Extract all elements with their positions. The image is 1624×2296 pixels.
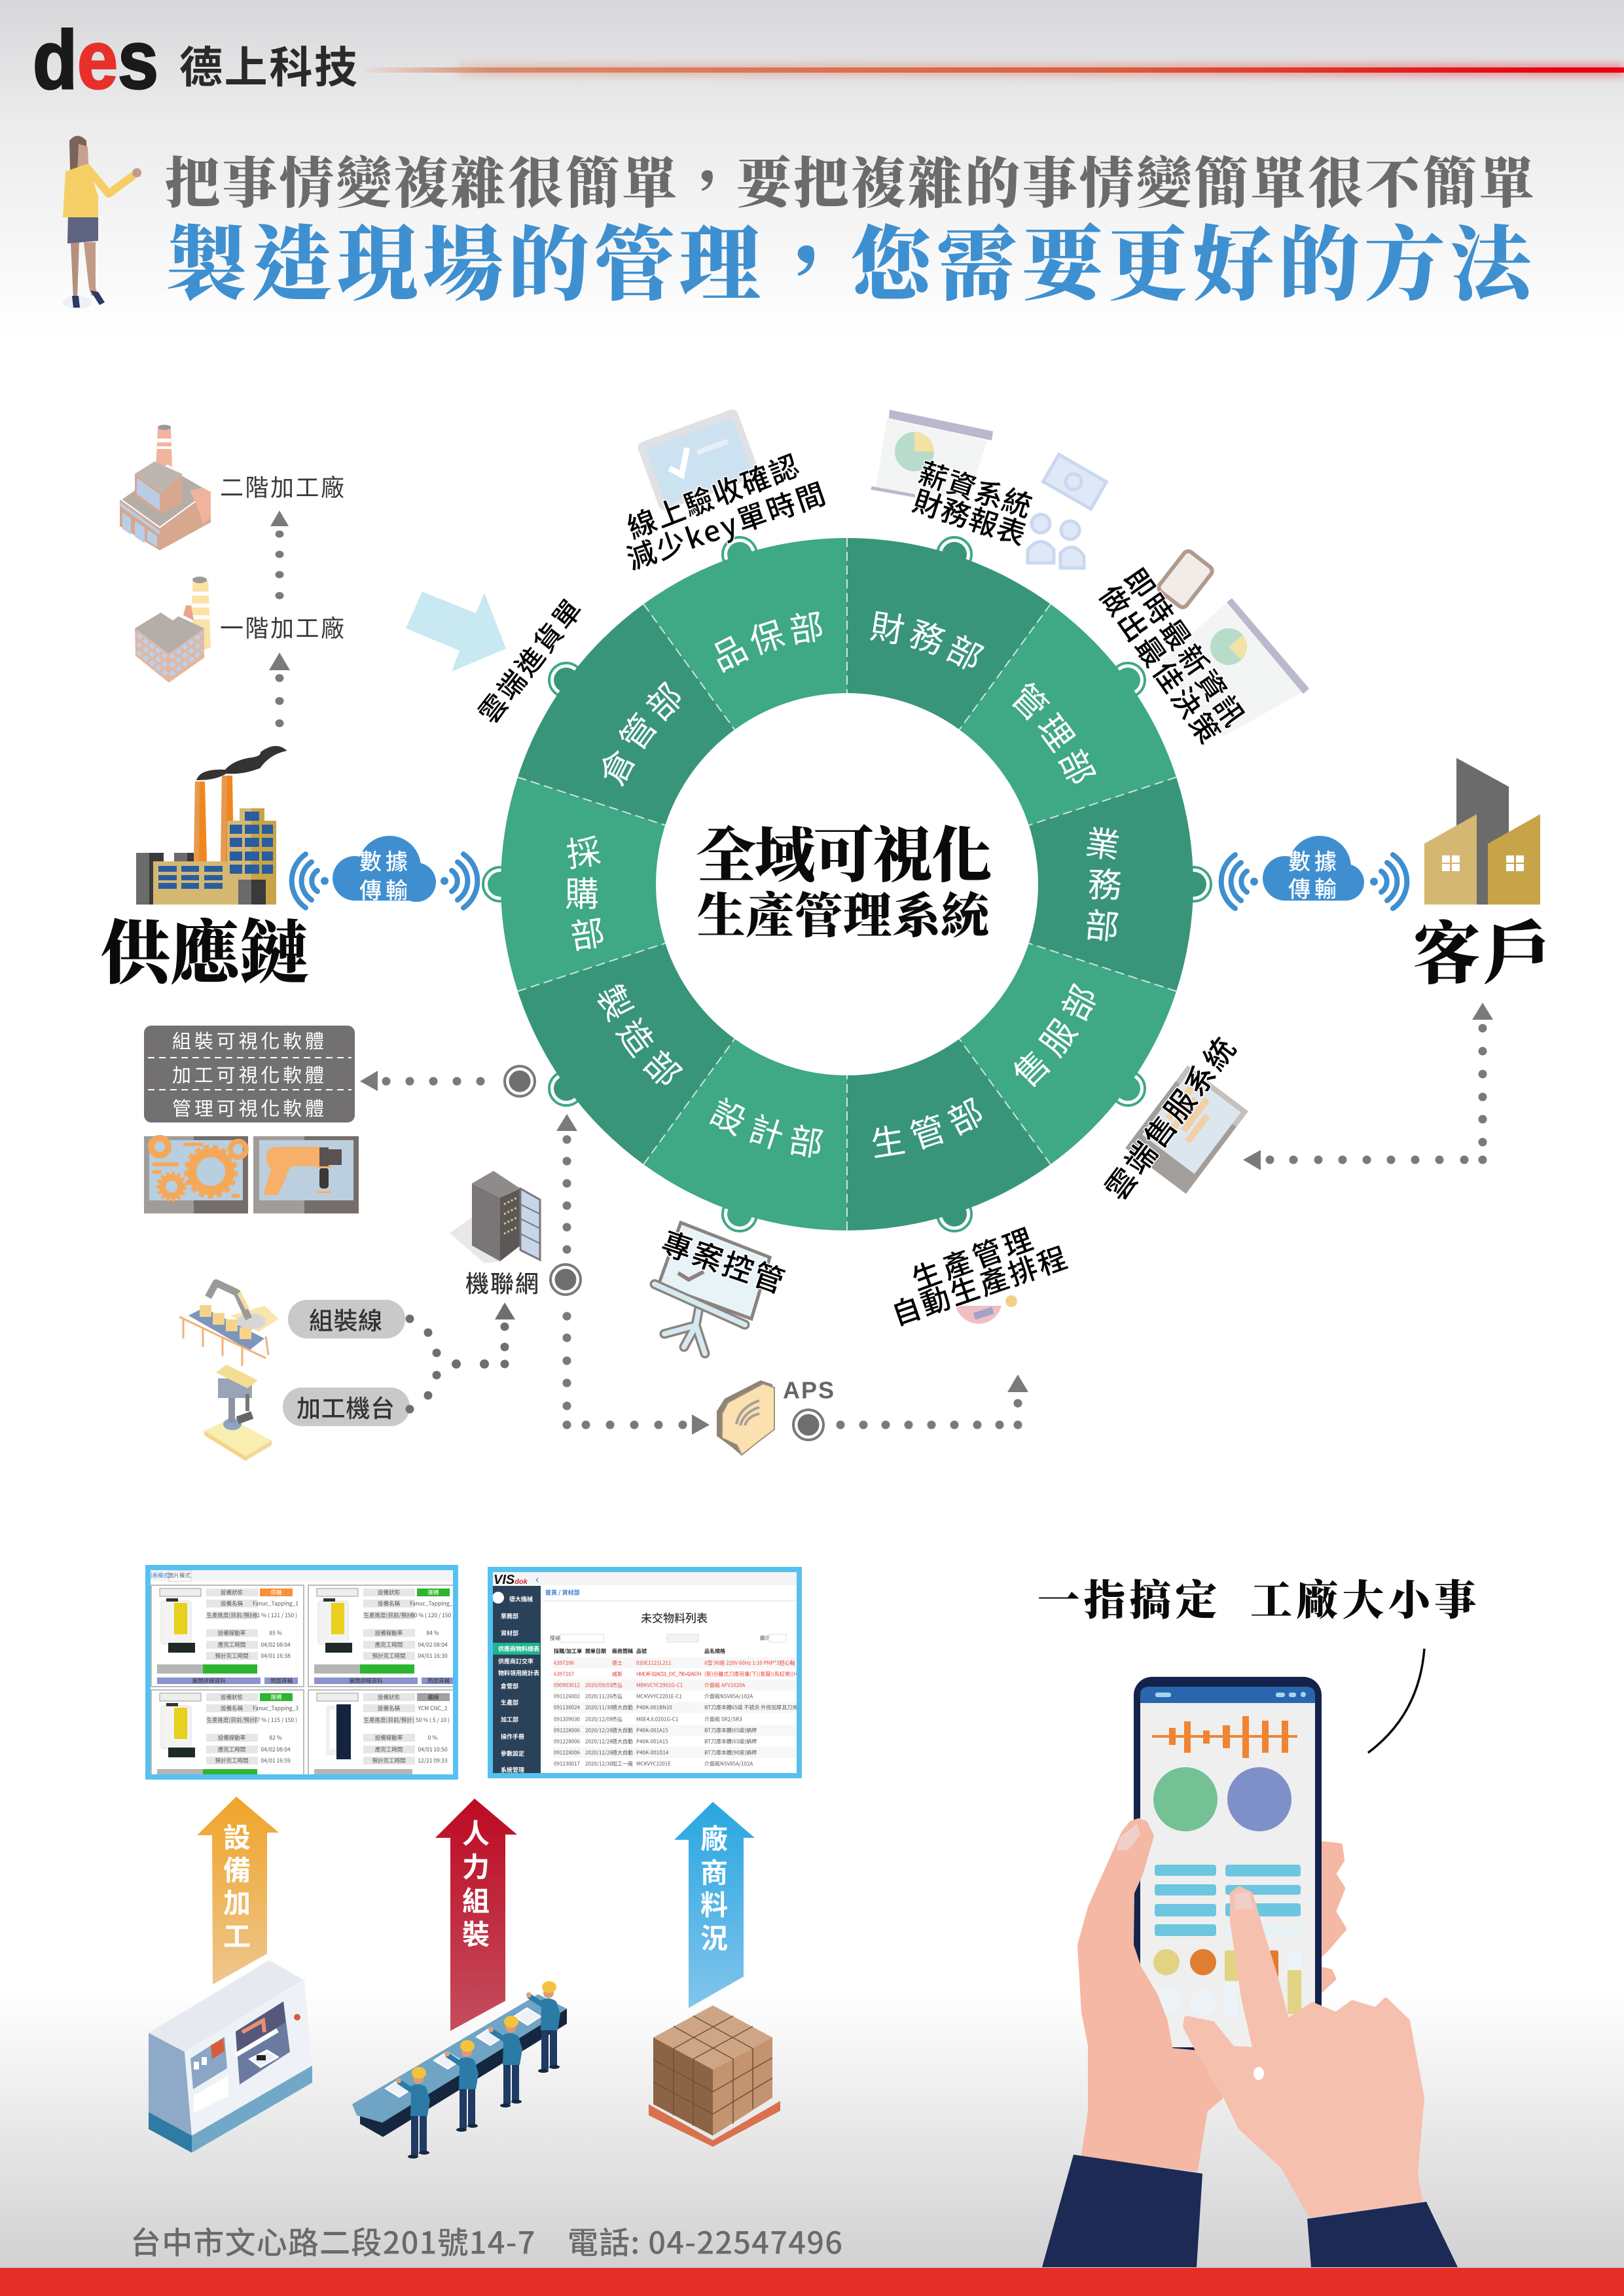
machine panel 2: 04/01 16:30 [418, 1652, 448, 1660]
panel: material list screenshot: 倉管部 [501, 1682, 518, 1690]
panel: material list screenshot: 德大機械 [509, 1594, 533, 1604]
panel: material list screenshot: 2020/12/30 [585, 1761, 613, 1767]
machine panel 1: 81 % ( 121 / 150 ) [254, 1611, 297, 1619]
machine panel 3: 82 % [269, 1734, 282, 1742]
panel: visualization software list [144, 1026, 355, 1122]
label: manufacturing: 部 [635, 1037, 694, 1096]
icon: CNC machine [149, 1960, 312, 2153]
icon: production scheduling [956, 1295, 1017, 1324]
panel: material list screenshot: 採購/加工單 [554, 1648, 582, 1655]
machine panel 3: 04/01 16:59 [261, 1757, 291, 1765]
label: warehouse [585, 671, 692, 793]
machine panel 2: 04/02 08:04 [418, 1641, 448, 1649]
label: design: 計 [744, 1102, 791, 1158]
panel: material list screenshot: VISdok [494, 1573, 528, 1587]
panel: material list screenshot: 品名規格 [704, 1648, 725, 1655]
callout: payroll and finance [908, 450, 1038, 554]
label: management: 管 [1002, 671, 1060, 729]
panel: material list screenshot: 091228006 [554, 1738, 581, 1745]
arrow: manpower assembly: 裝 [462, 1919, 490, 1950]
label: sales: 部 [1083, 897, 1121, 950]
icon: online acceptance check [636, 408, 761, 512]
node: software connector [505, 1066, 535, 1096]
panel: material list screenshot: 杰弘 [612, 1716, 623, 1723]
label: after-sales: 部 [1048, 975, 1107, 1028]
machine panel 4: 04/01 10:50 [418, 1746, 448, 1753]
label: first tier factory: 一階加工廠 [220, 615, 344, 641]
panel: material list screenshot: 供應商訂交率 [498, 1657, 533, 1665]
icon: left data transfer cloud: 傳輸 [359, 873, 408, 905]
panel: material list screenshot: P40K-001D14 [636, 1749, 669, 1757]
center title: 全域可視化 [696, 823, 992, 889]
icon: server rack [450, 1171, 540, 1263]
panel: material list screenshot: 091209030 [554, 1716, 581, 1723]
icon: drill monitor [253, 1136, 359, 1213]
arrow: manpower assembly: 組 [462, 1886, 490, 1916]
callout: production management: 自動生產排程 [886, 1234, 1072, 1334]
machine panel 4: 0 % [428, 1734, 437, 1742]
arrow: service to customer dots [1243, 1003, 1493, 1170]
label: after-sales: 售 [1000, 1037, 1059, 1096]
panel: equipment monitoring screenshot: 列表模式 [147, 1571, 169, 1579]
icon: left data transfer cloud: 數據 [359, 844, 408, 876]
panel: material list screenshot: 6397206 [554, 1660, 575, 1666]
panel: material list screenshot: 2020/12/28 [585, 1727, 613, 1734]
panel: material list screenshot: 德士 [612, 1660, 623, 1666]
panel: material list screenshot: 德大自動 [612, 1749, 633, 1757]
label: management [1002, 671, 1109, 793]
panel: material list screenshot: 搜尋: [550, 1635, 562, 1641]
phone audio bars [1152, 1716, 1297, 1758]
footer red bar [0, 2268, 1624, 2296]
panel: visualization software list: 管理可視化軟體 [172, 1094, 324, 1121]
panel: material list screenshot: MBKVCYC2901G-C1 [636, 1682, 683, 1689]
machine panel 3 [151, 1689, 304, 1774]
panel: material list screenshot: 2020/12/09 [585, 1716, 613, 1723]
callout: real-time information: 即時最新資訊 [1116, 558, 1256, 734]
panel: material list screenshot: 杰弘 [612, 1693, 623, 1700]
panel: material list screenshot: 廠商簡稱 [612, 1648, 633, 1655]
callout: project control: 專案控管 [657, 1219, 790, 1302]
panel: material list screenshot: 2020/12/28 [585, 1738, 613, 1745]
label: assembly line pill [288, 1300, 405, 1338]
arrow: vendor materials: 商 [700, 1857, 728, 1889]
label: purchasing: 部 [566, 905, 608, 959]
center title: 生產管理系統 [697, 889, 994, 944]
label: after-sales [1000, 975, 1107, 1096]
panel: material list screenshot: 品號 [636, 1648, 647, 1655]
panel: material list screenshot: (新)分離式刀庫荷重(下)(氣壓)(有紅燈)(H=250) [704, 1670, 811, 1678]
icon: cloud service monitor [1125, 1066, 1248, 1194]
footer address: 台中市文心路二段201號14-7 電話: 04-22547496 [130, 2217, 842, 2263]
label: sales [1083, 815, 1123, 950]
callout: payroll and finance: 財務報表 [908, 478, 1032, 554]
label: manufacturing [587, 975, 694, 1096]
panel: material list screenshot: 介面板NSV85A/102A [704, 1761, 753, 1767]
icon: project presentation board [655, 1223, 770, 1354]
arrow: APS to production dots [837, 1374, 1028, 1429]
label: design [703, 1085, 827, 1166]
icon: main supply-chain factory [136, 747, 284, 905]
machine panel 4: 離線 [427, 1693, 439, 1701]
callout: real-time information: 做出最佳決策 [1091, 575, 1231, 751]
arrow: cloud purchase order [406, 592, 506, 672]
machine panel 1: 停機 [270, 1588, 282, 1596]
panel: material list screenshot: ‹ [535, 1574, 539, 1585]
panel: material list screenshot: 杰弘 [612, 1682, 623, 1689]
panel: material list screenshot: 供應商物料總表 [498, 1644, 539, 1653]
title line 1: 把事情變複雜很簡單，要把複雜的事情變簡單很不簡單 [165, 154, 1534, 215]
icon: gears monitor [144, 1136, 248, 1213]
panel: material list screenshot: 091228006 [554, 1727, 581, 1734]
panel: material list screenshot: 顯示 [760, 1635, 770, 1641]
arrow: machines to network dots [406, 1302, 515, 1414]
label: quality: 部 [785, 599, 827, 653]
machine panel 3: 運轉 [270, 1693, 282, 1701]
label: machine pill: 加工機台 [297, 1389, 395, 1424]
icon: APS wifi bubble [717, 1380, 774, 1455]
machine panel 2 [308, 1585, 461, 1687]
panel: equipment monitoring screenshot [145, 1565, 461, 1791]
label: management: 部 [1049, 740, 1109, 793]
arrow: manufacturing to software dots [360, 1071, 484, 1091]
panel: material list screenshot: 德大自動 [612, 1738, 633, 1745]
panel: material list screenshot: P40K-001A15 [636, 1727, 668, 1734]
label: manufacturing: 製 [587, 975, 646, 1028]
panel: material list screenshot: BT刀庫本體65座 不銹杀 外徑加厚且刀夾加長25mm [704, 1704, 823, 1711]
panel: material list screenshot: 開單日期 [585, 1648, 606, 1655]
panel: equipment monitoring screenshot: 圖片模式 [168, 1571, 190, 1579]
panel: material list screenshot: P40K-001BN10 [636, 1704, 672, 1711]
panel: material list screenshot: 2020/12/28 [585, 1749, 613, 1757]
panel: material list screenshot: 020E1121L211 [636, 1660, 671, 1666]
callout: payroll and finance: 薪資系統 [914, 450, 1038, 526]
label: quality: 保 [742, 607, 790, 664]
icon: right data transfer cloud: 數據 [1288, 844, 1337, 876]
icon: left data transfer cloud [292, 836, 477, 908]
panel: material list screenshot: BT刀庫本體(90度)蝸桿 [704, 1749, 757, 1757]
panel: material list screenshot: 業務部 [501, 1611, 518, 1621]
panel: material list screenshot: 資材部 [501, 1628, 518, 1638]
panel: material list screenshot: 091130024 [554, 1704, 581, 1711]
label: finance: 部 [939, 621, 992, 681]
icon: first tier factory [135, 577, 211, 683]
machine panel 3: 04/02 08:04 [261, 1746, 291, 1753]
panel: material list screenshot: 德大自動 [612, 1704, 633, 1711]
callout: cloud purchase: 雲端進貨單 [468, 590, 590, 730]
icon: second tier factory [120, 425, 211, 550]
machine panel 4: YCM CNC_1 [417, 1704, 448, 1712]
panel: material list screenshot: BT刀庫本體(65座)蝸桿 [704, 1738, 757, 1745]
arrow: equipment machining: 加 [223, 1888, 251, 1919]
label: warehouse: 倉 [585, 740, 645, 793]
panel: material list screenshot: 系統管理 [501, 1766, 524, 1774]
icon: real-time dashboards [1157, 549, 1309, 736]
icon: customer buildings [1424, 758, 1540, 905]
callout: production management: 生產管理 [905, 1216, 1038, 1299]
label: second tier factory: 二階加工廠 [220, 474, 344, 501]
arrow: equipment machining [197, 1797, 279, 1984]
panel: material list screenshot: 未交物料列表 [641, 1609, 708, 1626]
label: design: 設 [703, 1085, 756, 1144]
icon: pallet of boxes [649, 2005, 780, 2147]
panel: material list screenshot: BT刀庫本體(65座)蝸桿 [704, 1727, 757, 1734]
panel: material list screenshot: 6397207 [554, 1670, 575, 1678]
logo: des 德上科技: 德上科技 [179, 43, 357, 92]
machine panel 2: 84 % [426, 1629, 439, 1637]
arrow: equipment machining: 備 [223, 1855, 251, 1886]
panel: material list screenshot: MCKVYC2201E [636, 1761, 671, 1767]
arrow: manpower assembly: 人 [462, 1818, 490, 1850]
arrow: vendor materials [674, 1802, 755, 2008]
logo: des 德上科技: des [33, 14, 158, 106]
label: APS: APS [783, 1377, 834, 1403]
label: manufacturing: 造 [608, 1008, 668, 1064]
icon: right data transfer cloud: 傳輸 [1288, 872, 1337, 903]
label: assembly line pill: 組裝線 [309, 1301, 382, 1336]
panel: material list screenshot: 091126002 [554, 1693, 581, 1700]
panel: visualization software list: 加工可視化軟體 [172, 1060, 324, 1088]
panel: material list screenshot: 介面板NSV85A/102A [704, 1693, 753, 1700]
left sleeve [1042, 2155, 1202, 2267]
panel: material list screenshot: MCKVVYC2201E-C1 [636, 1693, 682, 1700]
icon: assembly line workers [352, 1981, 567, 2159]
panel: material list screenshot: 2020/09/03 [585, 1682, 613, 1689]
panel: material list screenshot: 介面板 AFV1020A [704, 1682, 745, 1689]
machine panel 4: 50 % ( 5 / 10 ) [416, 1716, 450, 1724]
panel: material list screenshot: II型 90度 220V 60Hz 1:10 PNP*3迴心軸 [704, 1660, 795, 1666]
node: machine network connector [550, 1265, 581, 1295]
panel: material list screenshot: 參數設定 [501, 1749, 524, 1758]
panel: material list screenshot: 生產部 [501, 1698, 518, 1707]
arrow: manpower assembly [435, 1799, 517, 2031]
panel: material list screenshot: 091230017 [554, 1761, 581, 1767]
panel: department wheel [483, 537, 1211, 1231]
panel: material list screenshot: HMC4F-02AC01_1YC_790-42A67H [636, 1670, 702, 1678]
label: management: 理 [1028, 703, 1088, 759]
label: production control: 生 [867, 1113, 908, 1166]
label: production control [867, 1085, 991, 1166]
machine panel 2: 運轉 [427, 1588, 439, 1596]
left hand [1079, 1820, 1221, 2170]
machine panel 1 [151, 1585, 304, 1687]
callout: online acceptance: 線上驗收確認 [621, 443, 804, 547]
right sleeve [1307, 2202, 1458, 2267]
arrow: second tier dots [270, 511, 289, 600]
machine panel 1: 04/01 16:38 [261, 1652, 291, 1660]
panel: material list screenshot: 操作手冊 [501, 1732, 524, 1741]
label: design: 部 [786, 1113, 827, 1166]
label: purchasing [564, 824, 608, 959]
wheel sectors [501, 538, 1193, 1230]
right hand [1185, 1889, 1422, 2215]
panel: material list screenshot [488, 1567, 823, 1778]
label: quality [702, 599, 827, 681]
red header line [363, 63, 1624, 77]
icon: phone held in hands [1042, 1677, 1458, 2267]
machine panel 1: 04/02 08:04 [261, 1641, 291, 1649]
label: after-sales: 服 [1026, 1008, 1086, 1064]
label: finance: 財 [867, 599, 909, 653]
label: finance: 務 [904, 607, 952, 664]
label: machine network: 機聯網 [465, 1265, 539, 1299]
panel: material list screenshot: 威斯 [612, 1670, 623, 1678]
icon: drill press [204, 1365, 272, 1461]
left hand fingers behind phone [1321, 1844, 1344, 1990]
panel: material list screenshot: M0E4JL0201G-C1 [636, 1716, 678, 1723]
icon: right data transfer cloud [1221, 836, 1407, 908]
label: warehouse: 管 [606, 703, 666, 759]
machine panel 4: 12/21 09:33 [418, 1757, 448, 1765]
label: purchasing: 購 [565, 867, 599, 916]
panel: material list screenshot: 2020/11/30 [585, 1704, 613, 1711]
panel: visualization software list: 組裝可視化軟體 [172, 1026, 324, 1054]
icon: presenter woman [63, 136, 141, 309]
machine panel 3: Fanuc_Tapping_3 [253, 1704, 298, 1712]
machine panel 2: 80 % ( 120 / 150 ) [411, 1611, 454, 1619]
label: quality: 品 [702, 621, 755, 681]
heading: supply chain: 供應鏈 [101, 916, 309, 992]
label: sales: 務 [1087, 857, 1123, 907]
label: production control: 部 [938, 1085, 991, 1144]
panel: material list screenshot: 加工部 [501, 1715, 518, 1724]
phone body [1134, 1677, 1322, 2054]
heading: one finger: 一指搞定 工廠大小事 [1038, 1577, 1476, 1624]
label: production control: 管 [903, 1102, 950, 1158]
arrow: manpower assembly: 力 [462, 1852, 490, 1882]
arrow: vendor materials: 廠 [700, 1823, 728, 1855]
connector rings [483, 537, 1211, 1231]
arrow: equipment machining: 設 [223, 1822, 251, 1854]
panel: material list screenshot: 2020/11/26 [585, 1693, 613, 1700]
panel: material list screenshot: 物料領用統計表 [498, 1669, 539, 1677]
panel: material list screenshot: 加工一廠 [612, 1761, 633, 1767]
node: APS connector [793, 1410, 823, 1440]
machine panel 2: Fanuc_Tapping_2 [410, 1600, 456, 1607]
panel: material list screenshot: 德大自動 [612, 1727, 633, 1734]
label: sales: 業 [1083, 815, 1123, 869]
arrow: first tier dots [269, 653, 290, 727]
callout: cloud service: 雲端售服系統 [1094, 1028, 1244, 1208]
arrow: vertical dots to manufacturing and APS [556, 1114, 710, 1435]
heading: customer: 客戶 [1413, 916, 1551, 992]
arrow: equipment machining: 工 [223, 1922, 251, 1952]
panel: material list screenshot: 090903012 [554, 1682, 581, 1689]
machine panel 1: Fanuc_Tapping_1 [253, 1600, 298, 1607]
logo: des 德上科技 [33, 14, 357, 106]
arrow: vendor materials: 料 [700, 1890, 728, 1920]
machine panel 1: 85 % [269, 1629, 282, 1637]
callout: online acceptance: 減少key單時間 [621, 471, 830, 578]
label: purchasing: 採 [564, 824, 603, 876]
center title [696, 823, 994, 944]
title line 2: 製造現場的管理，您需要更好的方法 [166, 221, 1540, 310]
panel: material list screenshot: 首頁 / 資材部 [545, 1588, 580, 1597]
label: warehouse: 部 [634, 671, 692, 729]
machine panel 3: 77 % ( 115 / 150 ) [254, 1716, 297, 1724]
label: finance [867, 599, 992, 681]
panel: material list screenshot: 091228006 [554, 1749, 581, 1757]
icon: assembly robot line [179, 1283, 279, 1366]
panel: material list screenshot: P40K-001A15 [636, 1738, 668, 1745]
machine panel 4 [308, 1689, 453, 1774]
panel: material list screenshot: 介面板 SR2/SR3 [704, 1716, 742, 1723]
arrow: vendor materials: 況 [700, 1923, 728, 1954]
callout curve [1368, 1649, 1424, 1753]
icon: payroll report [871, 410, 1106, 568]
